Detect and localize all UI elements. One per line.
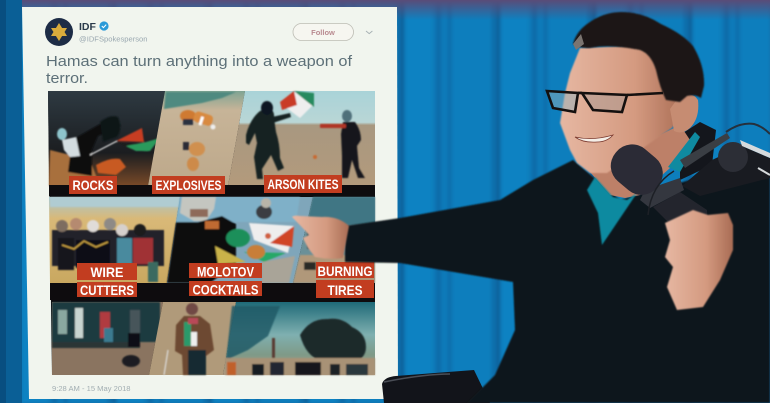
photo: man with crutches bbox=[149, 302, 236, 375]
label: WIRE CUTTERS bbox=[77, 263, 137, 298]
small mic bbox=[680, 133, 730, 168]
windscreen bbox=[603, 136, 671, 203]
ear bbox=[670, 94, 698, 132]
hair bbox=[573, 12, 704, 102]
label: ROCKS: ROCKS bbox=[72, 178, 114, 193]
avatar: IDF logo bbox=[45, 18, 73, 46]
timestamp: 9:28 AM - 15 May 2018 bbox=[52, 384, 131, 393]
label: ARSON KITES: ARSON KITES bbox=[268, 177, 338, 192]
tweet text: Hamas can turn anything into a weapon of bbox=[46, 53, 353, 70]
label: EXPLOSIVES: EXPLOSIVES bbox=[156, 178, 222, 193]
photo: burning tires bbox=[293, 197, 375, 283]
boom joint bbox=[718, 142, 748, 172]
account name: IDF bbox=[79, 21, 96, 33]
follow button bbox=[293, 24, 354, 40]
glasses bbox=[547, 91, 663, 112]
label: BURNING TIRES: TIRES bbox=[328, 282, 362, 298]
label: BURNING TIRES bbox=[316, 262, 374, 298]
black label strip rows bbox=[49, 185, 375, 196]
icon: chevron bbox=[366, 31, 372, 34]
label: WIRE CUTTERS: WIRE bbox=[90, 264, 124, 280]
label: EXPLOSIVES bbox=[152, 176, 225, 194]
label: MOLOTOV COCKTAILS: COCKTAILS bbox=[192, 282, 258, 298]
pointing hand bbox=[292, 216, 349, 259]
shirt strip beside mic bbox=[668, 132, 700, 172]
photo: arson kites bbox=[228, 91, 375, 186]
mouth bbox=[575, 135, 613, 142]
sweater: body and pointing arm bbox=[345, 160, 770, 403]
neck bbox=[590, 125, 690, 198]
presenter bbox=[292, 12, 770, 403]
shirt collar bbox=[587, 177, 637, 245]
office chair bbox=[382, 370, 490, 403]
black base bbox=[48, 91, 375, 375]
face bbox=[560, 45, 685, 173]
tweet text: terror. bbox=[46, 70, 88, 87]
follow button: Follow bbox=[311, 28, 335, 37]
label: MOLOTOV COCKTAILS: MOLOTOV bbox=[197, 264, 255, 280]
mic body bbox=[653, 192, 708, 232]
label: BURNING TIRES: BURNING bbox=[318, 263, 373, 279]
label: MOLOTOV COCKTAILS bbox=[189, 263, 262, 298]
microphone bbox=[603, 124, 770, 232]
label: ARSON KITES bbox=[264, 175, 342, 193]
photo: rocks bbox=[48, 91, 165, 186]
photo: crowd in teal bbox=[52, 302, 163, 375]
mic mount bbox=[640, 178, 684, 208]
label: WIRE CUTTERS: CUTTERS bbox=[80, 282, 134, 298]
boom arm bbox=[682, 146, 770, 196]
account handle: @IDFSpokesperson bbox=[79, 34, 148, 44]
photo: wire cutters crowd bbox=[49, 197, 180, 283]
icon: verified badge bbox=[99, 21, 109, 31]
tweet image collage bbox=[48, 91, 375, 375]
gray hair at temple bbox=[573, 34, 584, 50]
photo: molotov cocktails bbox=[167, 197, 313, 283]
sweater: collar behind neck bbox=[680, 122, 716, 180]
panel: tweet card bbox=[22, 7, 398, 399]
holding hand bbox=[665, 210, 733, 310]
photo: smoke and crowd bbox=[223, 302, 375, 375]
photo: explosives bbox=[148, 91, 245, 186]
